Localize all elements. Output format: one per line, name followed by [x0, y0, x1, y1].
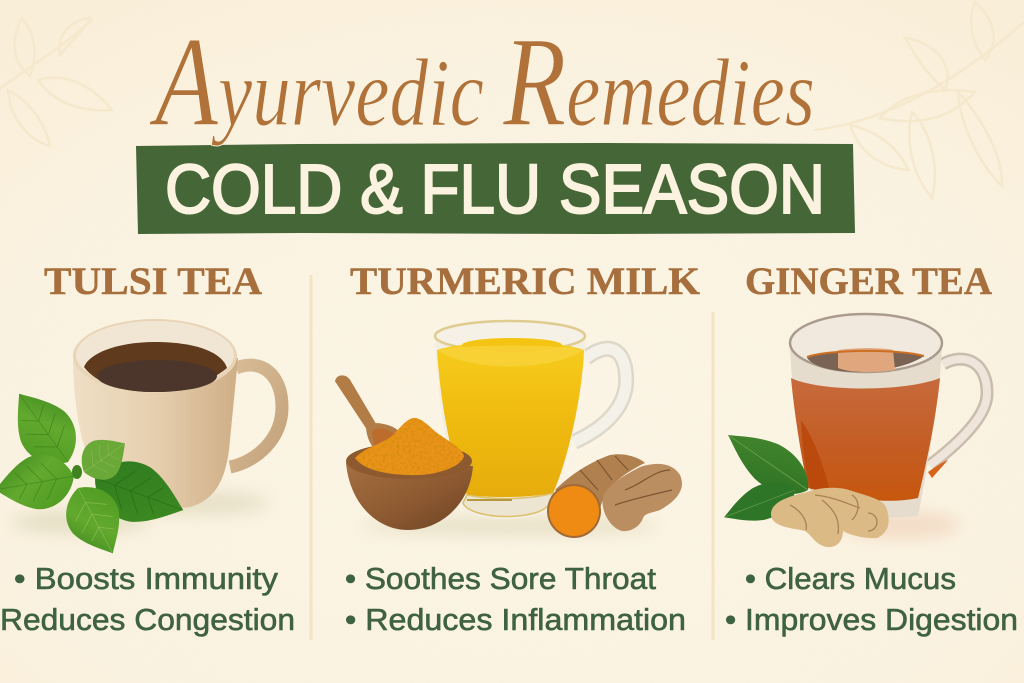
- banner: [136, 143, 855, 234]
- panel: ginger tea: [716, 260, 1018, 637]
- panel: tulsi tea: [0, 260, 295, 637]
- panel: turmeric milk: [336, 260, 701, 637]
- decorative leaves: top left: [0, 18, 112, 146]
- banner text: COLD & FLU SEASON: [165, 150, 825, 228]
- illustration: mug with tulsi leaves: [0, 319, 282, 566]
- title: Ayurvedic Remedies: [149, 11, 815, 153]
- benefits: tulsi tea: Reduces Congestion: [0, 602, 295, 637]
- benefits: tulsi tea: [0, 561, 295, 637]
- benefits: turmeric milk: • Soothes Sore Throat: [345, 561, 656, 596]
- illustration: golden milk, bowl and turmeric root: [336, 321, 682, 538]
- benefits: ginger tea: • Clears Mucus: [745, 561, 956, 596]
- benefits: ginger tea: [725, 561, 1018, 637]
- benefits: ginger tea: • Improves Digestion: [725, 602, 1018, 637]
- column dividers: [311, 275, 713, 640]
- heading: tulsi tea: TULSI TEA: [44, 260, 262, 303]
- heading: turmeric milk: TURMERIC MILK: [350, 260, 701, 303]
- benefits: turmeric milk: [345, 561, 686, 637]
- heading: ginger tea: GINGER TEA: [745, 260, 992, 303]
- benefits: tulsi tea: • Boosts Immunity: [14, 561, 279, 596]
- decorative leaves: top right: [815, 2, 1024, 198]
- benefits: turmeric milk: • Reduces Inflammation: [345, 602, 686, 637]
- illustration: ginger tea glass with root and leaves: [716, 314, 987, 547]
